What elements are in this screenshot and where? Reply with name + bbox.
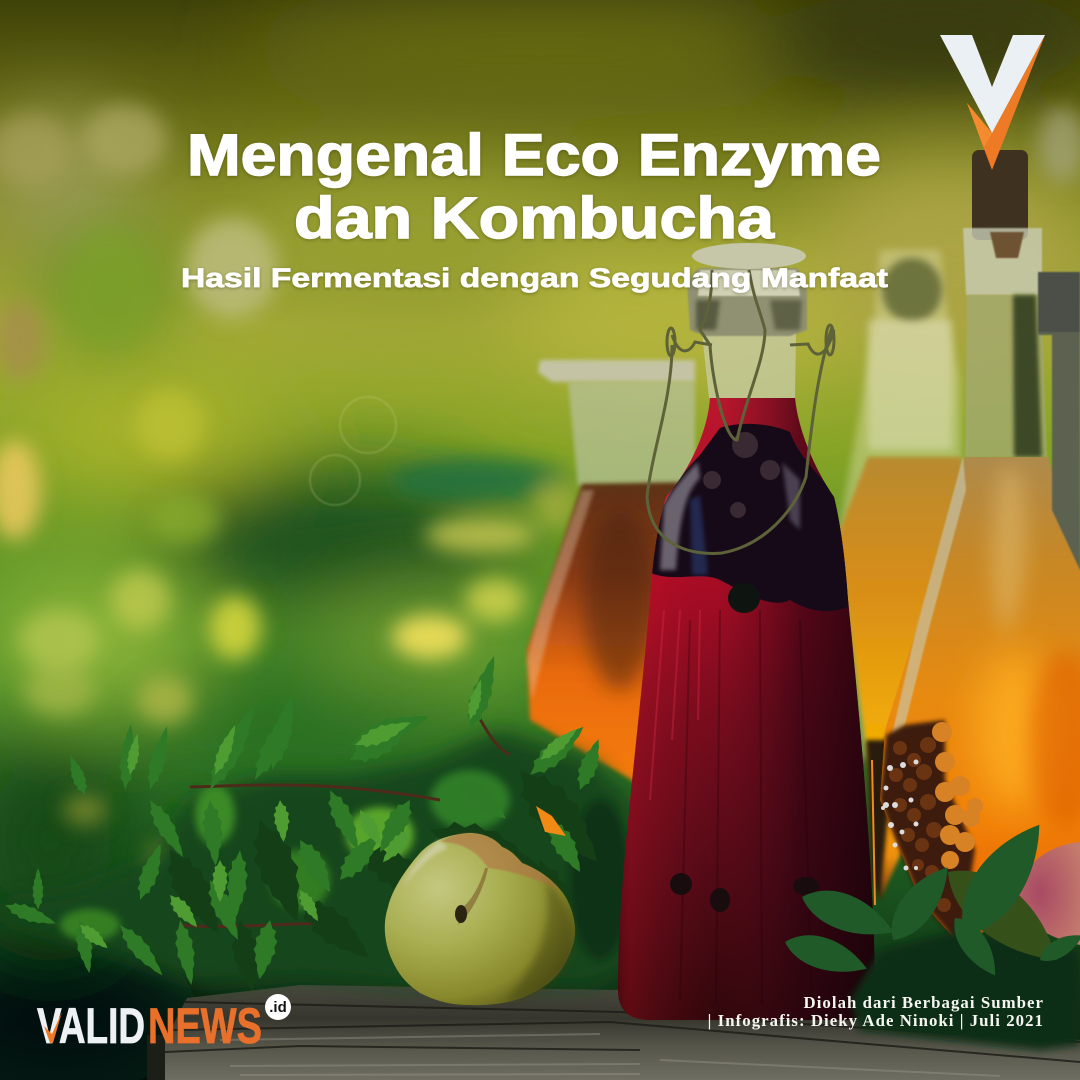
- NEWS wordmark: NEWS: [148, 998, 262, 1054]
- title: [181, 123, 888, 293]
- brand V logo: [940, 35, 1045, 170]
- stems: [180, 700, 510, 926]
- embossed bubble texture: [880, 720, 983, 945]
- grey wooden post at right edge: [1038, 272, 1080, 570]
- pear: [385, 833, 575, 1005]
- back right bottle: [838, 250, 962, 900]
- mint dark mass: [850, 930, 1080, 1050]
- heading line one: Mengenal Eco Enzyme: [187, 123, 881, 188]
- V accent: [44, 1012, 62, 1043]
- nettle foliage: [0, 653, 632, 993]
- peach at right: [1013, 842, 1080, 945]
- source credit: [708, 993, 1044, 1030]
- heading line two: dan Kombucha: [294, 186, 775, 251]
- foliage sunlit patch: [60, 770, 630, 960]
- mint leaves: [780, 810, 1080, 1050]
- subtitle: Hasil Fermentasi dengan Segudang Manfaat: [181, 263, 888, 293]
- cap: [688, 243, 807, 336]
- back left bottle: [527, 360, 695, 800]
- dark fruit mass: [645, 424, 851, 611]
- id badge: [265, 994, 291, 1020]
- credit line one: Diolah dari Berbagai Sumber: [804, 993, 1044, 1012]
- foliage mass: [0, 730, 632, 985]
- credit line two: | Infografis: Dieky Ade Ninoki | Juli 2021: [708, 1011, 1044, 1030]
- right bottle with cork: [880, 150, 1080, 945]
- wire bail: [647, 270, 834, 553]
- main bottle with red kombucha: [610, 243, 880, 1028]
- logo: VALIDNEWS.id: [37, 994, 291, 1054]
- bottle liquid: [610, 398, 880, 1028]
- bottle neck glass: [702, 333, 796, 398]
- wooden table: [147, 985, 1080, 1080]
- VALID wordmark: VALID: [37, 998, 145, 1054]
- id badge: .id: [269, 999, 287, 1016]
